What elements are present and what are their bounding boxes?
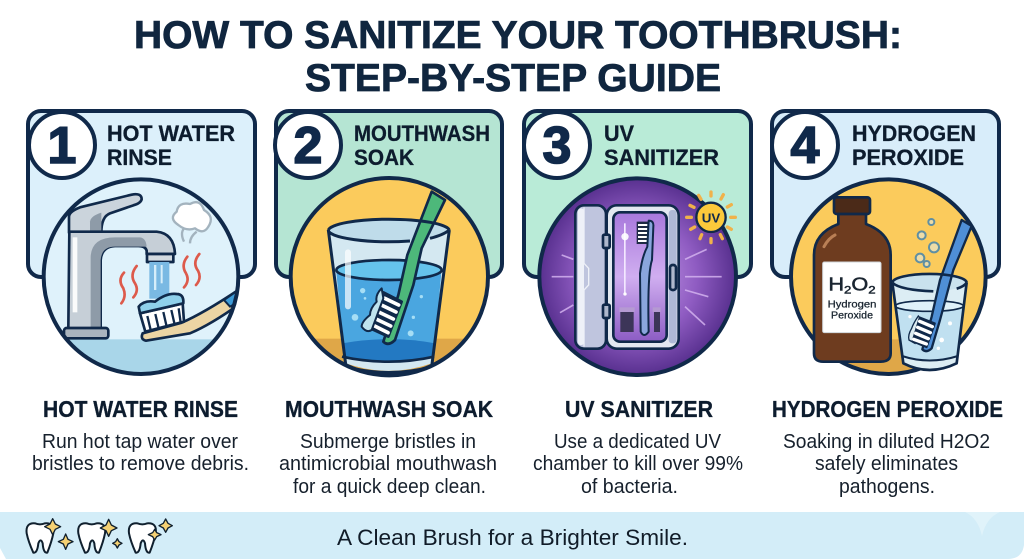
bottle label text: 2 bbox=[844, 284, 851, 296]
panel 1 header card bbox=[28, 111, 255, 277]
icon: open uv case bbox=[575, 205, 679, 349]
caption: hydrogen peroxide: HYDROGEN PEROXIDE bbox=[772, 396, 1003, 422]
glass rim bbox=[328, 219, 449, 372]
title: HOW TO SANITIZE YOUR TOOTHBRUSH: bbox=[134, 14, 902, 57]
icon: toothbrush with paste bbox=[139, 290, 245, 341]
caption: uv sanitizer: UV SANITIZER bbox=[565, 396, 713, 422]
caption: uv sanitizer: chamber to kill over 99% bbox=[533, 453, 743, 475]
title: STEP-BY-STEP GUIDE bbox=[305, 57, 721, 100]
panel 4 number badge bbox=[772, 112, 838, 178]
illustration: glass with toothbrush bbox=[287, 178, 493, 379]
caption: mouthwash soak: Submerge bristles in bbox=[300, 431, 476, 453]
panel 1 number badge: 1 bbox=[48, 117, 76, 175]
panel 3 header card bbox=[524, 111, 751, 277]
icon: small glass bbox=[892, 274, 967, 370]
panel: step 1 hot water rinse bbox=[28, 111, 255, 379]
caption: hydrogen peroxide: pathogens. bbox=[839, 476, 935, 498]
panel 2 number badge bbox=[275, 112, 341, 178]
panel 3 number badge bbox=[524, 112, 590, 178]
glass outline bbox=[892, 274, 967, 370]
bottle label text: H bbox=[828, 274, 842, 295]
panel: step 3 uv sanitizer bbox=[524, 111, 751, 375]
circle outline bbox=[44, 179, 238, 374]
footer band bbox=[0, 512, 1024, 559]
icon: green toothbrush bbox=[362, 192, 445, 344]
icon: heat waves bbox=[120, 254, 200, 303]
caption: hydrogen peroxide: safely eliminates bbox=[815, 453, 958, 475]
panel 2 heading bbox=[354, 121, 490, 170]
icon: uv lamp bbox=[621, 223, 629, 296]
icon: bubbles bbox=[916, 219, 939, 267]
panel: step 2 mouthwash soak bbox=[275, 111, 502, 379]
bottle label text bbox=[828, 274, 876, 322]
caption: hot water rinse bbox=[32, 396, 249, 475]
panel 4 number badge: 4 bbox=[791, 117, 820, 175]
caption: hot water rinse: HOT WATER RINSE bbox=[43, 396, 238, 422]
icon: brown bottle bbox=[814, 197, 891, 362]
panel 3 heading: UV bbox=[604, 121, 634, 146]
caption: mouthwash soak bbox=[279, 396, 497, 498]
icon: uv sun badge bbox=[687, 192, 735, 243]
icon: toothbrush in case bbox=[637, 221, 653, 335]
panel 1 heading bbox=[107, 121, 235, 170]
caption: hot water rinse: bristles to remove debris. bbox=[32, 453, 249, 475]
bottle label text: 2 bbox=[868, 284, 876, 296]
illustration: uv case bbox=[539, 178, 736, 375]
caption: uv sanitizer: Use a dedicated UV bbox=[554, 431, 722, 453]
panel 4 header card bbox=[772, 111, 999, 277]
icon: faucet bbox=[64, 194, 175, 338]
panel 2 heading: SOAK bbox=[354, 145, 414, 170]
illustration: faucet and toothbrush bbox=[33, 178, 250, 379]
panel 2 heading: MOUTHWASH bbox=[354, 121, 490, 146]
panel 3 heading bbox=[604, 121, 719, 170]
panel 4 heading: PEROXIDE bbox=[852, 145, 964, 170]
title bbox=[134, 14, 902, 100]
panel: step 4 hydrogen peroxide bbox=[772, 111, 999, 377]
circle outline bbox=[291, 178, 488, 375]
caption: mouthwash soak: MOUTHWASH SOAK bbox=[285, 396, 493, 422]
footer tagline: A Clean Brush for a Brighter Smile. bbox=[337, 525, 688, 550]
panel 3 heading: SANITIZER bbox=[604, 145, 719, 170]
panel 1 heading: HOT WATER bbox=[107, 121, 235, 146]
panel 1 heading: RINSE bbox=[107, 145, 172, 170]
panel 3 number badge: 3 bbox=[543, 117, 571, 175]
panel 2 number badge: 2 bbox=[294, 117, 322, 175]
icon: blue toothbrush bbox=[909, 220, 972, 351]
circle outline bbox=[539, 178, 736, 375]
caption: mouthwash soak: antimicrobial mouthwash bbox=[279, 453, 497, 475]
panel 4 heading bbox=[852, 121, 976, 170]
caption: hot water rinse: Run hot tap water over bbox=[42, 431, 238, 453]
icon: water stream bbox=[149, 262, 169, 299]
icon: uv sun badge: UV bbox=[702, 210, 720, 225]
bottle label text: O bbox=[851, 274, 868, 295]
icon: glass and mouthwash bbox=[328, 218, 450, 371]
panel 2 header card bbox=[276, 111, 502, 277]
caption: hydrogen peroxide: Soaking in diluted H2O2 bbox=[783, 431, 990, 453]
caption: uv sanitizer: of bacteria. bbox=[581, 476, 678, 498]
caption: hydrogen peroxide bbox=[772, 396, 1003, 498]
caption: mouthwash soak: for a quick deep clean. bbox=[293, 476, 486, 498]
caption: uv sanitizer bbox=[533, 396, 743, 498]
icon: steam cloud bbox=[173, 202, 211, 243]
bottle label text: Peroxide bbox=[831, 311, 873, 322]
panel 1 number badge bbox=[29, 112, 95, 178]
panel 4 heading: HYDROGEN bbox=[852, 121, 976, 146]
icon: sparkling teeth bbox=[27, 519, 172, 553]
illustration: peroxide bottle and glass bbox=[791, 179, 986, 377]
icon: holders bbox=[619, 307, 661, 332]
uv light rays bbox=[552, 249, 722, 325]
bottle label text: Hydrogen bbox=[828, 299, 876, 310]
